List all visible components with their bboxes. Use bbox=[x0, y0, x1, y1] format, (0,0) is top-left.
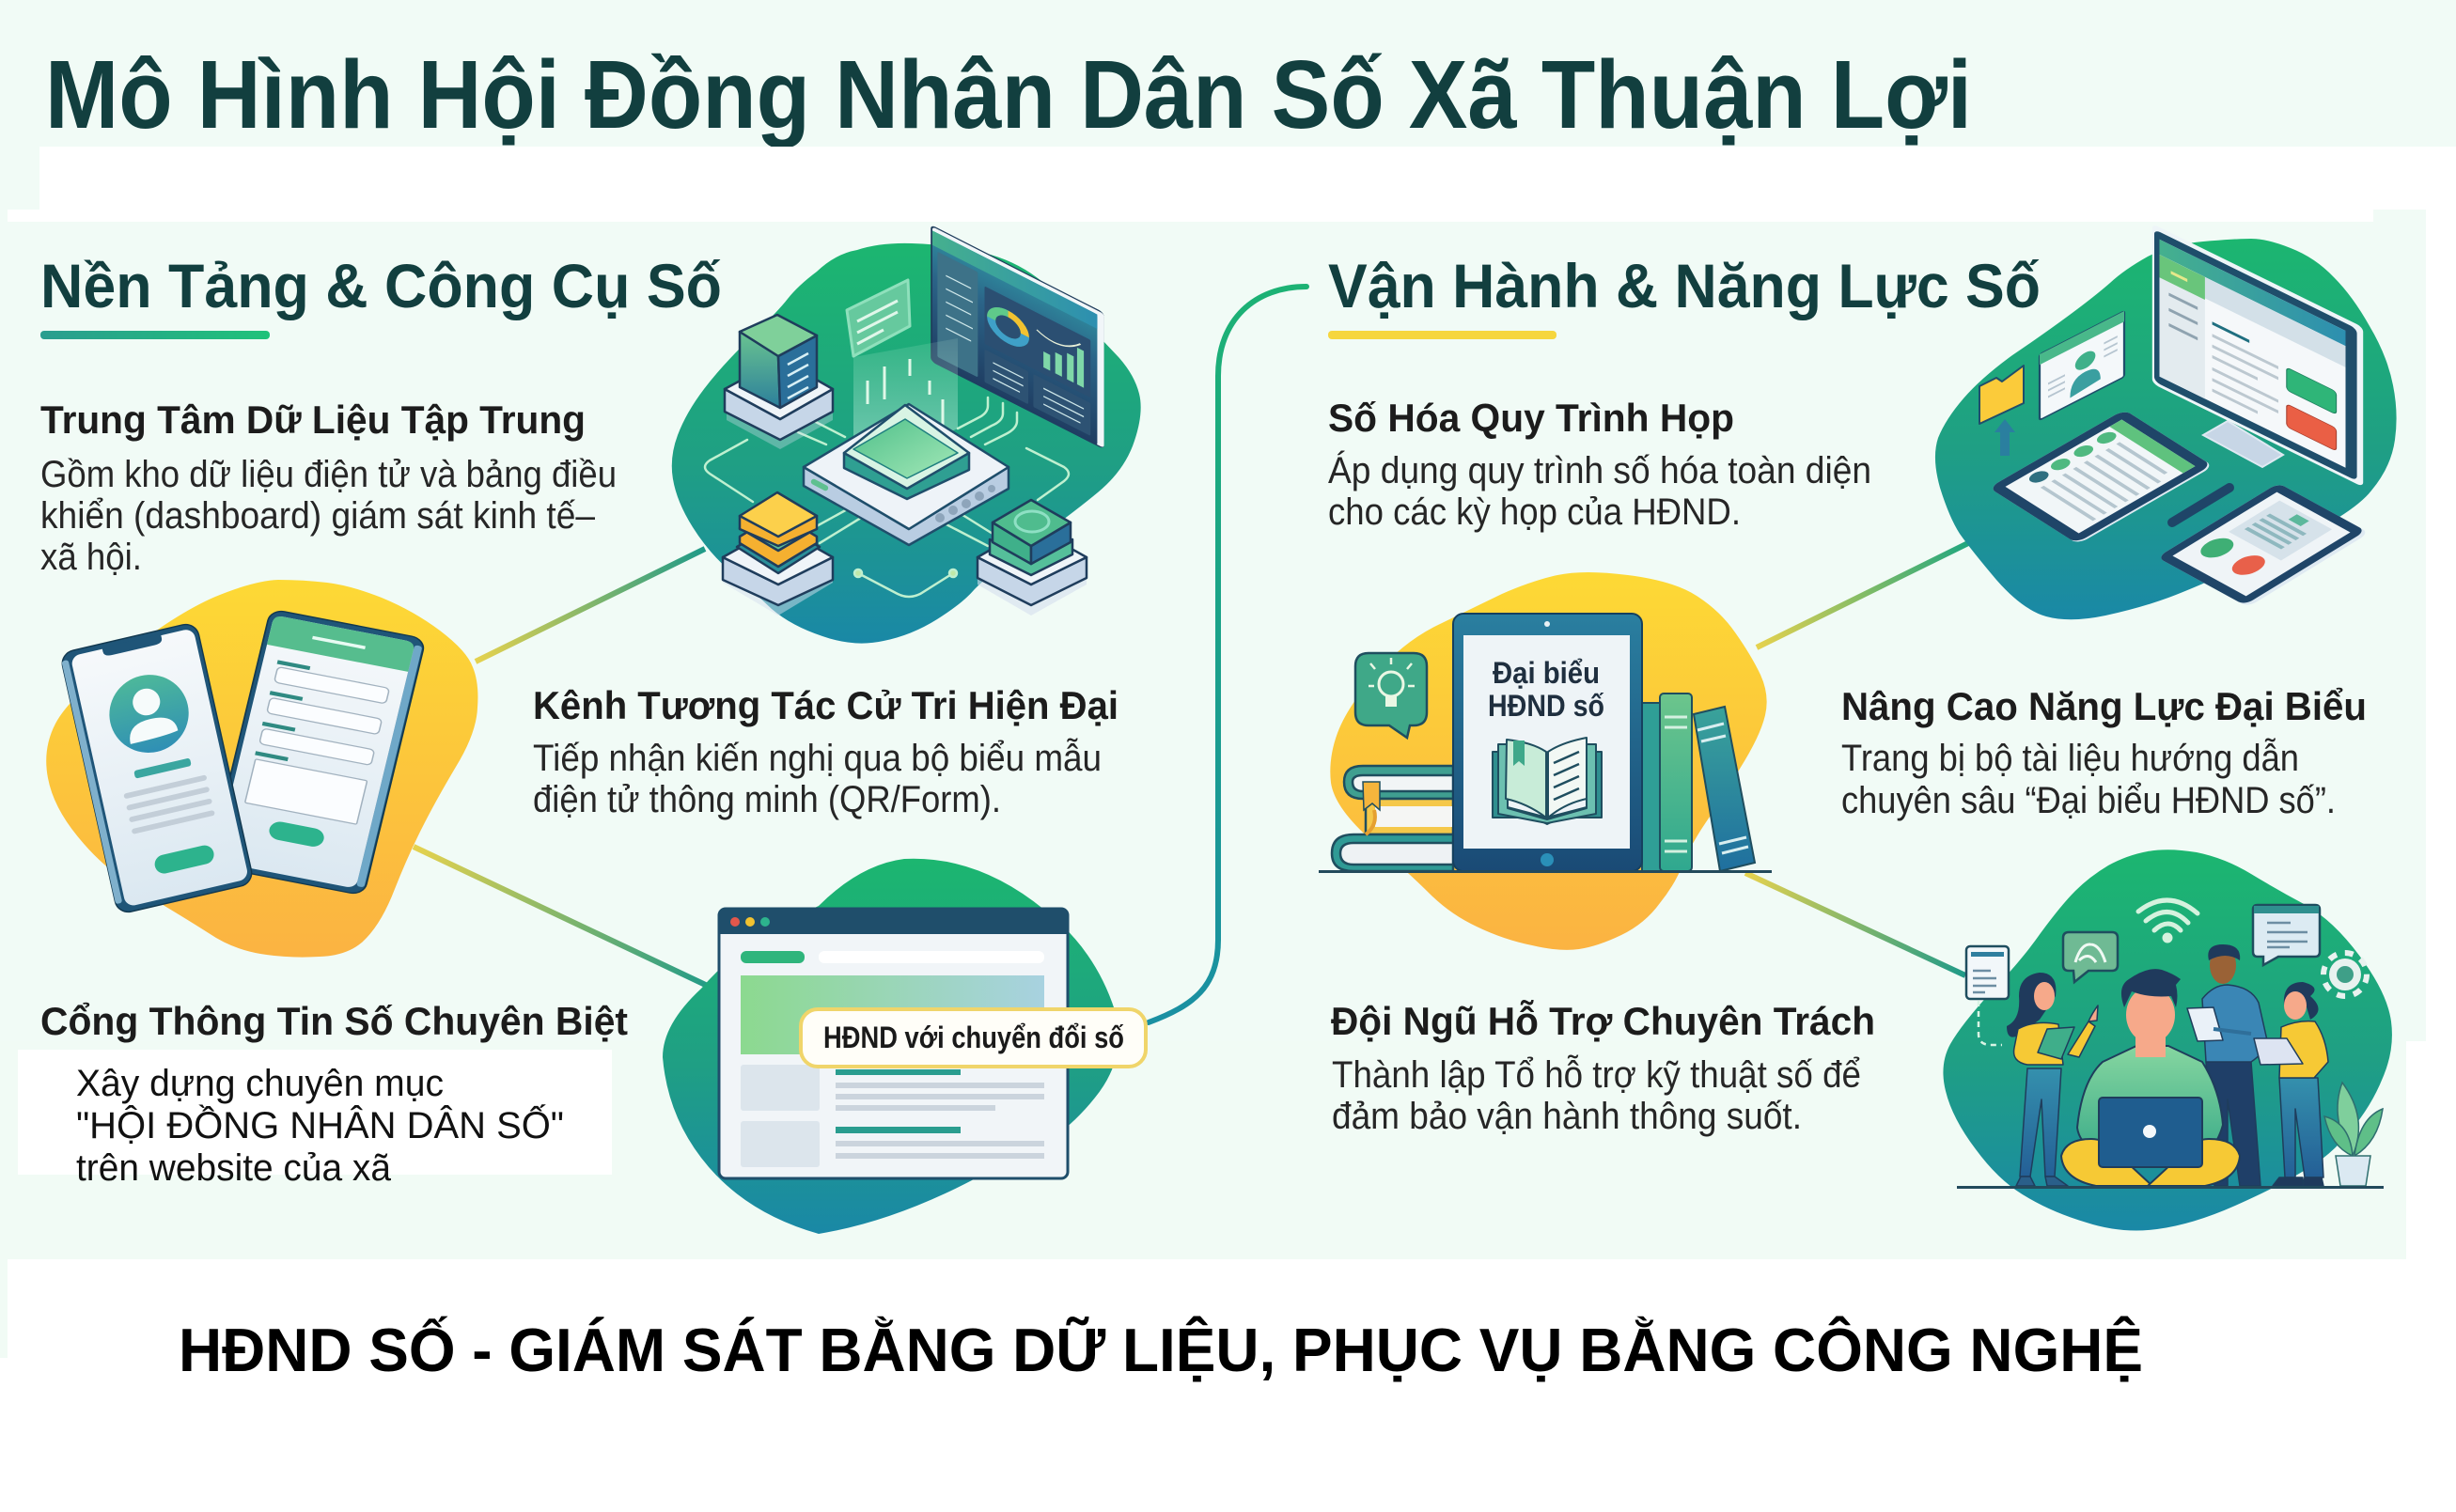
text block: Trung Tâm Dữ Liệu Tập Trung: khiển (dashboard) giám sát kinh tế– bbox=[40, 495, 596, 537]
title: Mô Hình Hội Đồng Nhân Dân Số Xã Thuận Lợi bbox=[45, 40, 1972, 148]
text block: Đội Ngũ Hỗ Trợ Chuyên Trách bbox=[1331, 998, 1875, 1137]
open book bbox=[1493, 738, 1602, 824]
tablet: agenda bbox=[1989, 410, 2214, 544]
shelf bbox=[1319, 870, 1772, 873]
person: woman right bbox=[2254, 982, 2328, 1186]
monitor stand bbox=[2203, 421, 2283, 467]
chat icon bbox=[2063, 932, 2118, 982]
plant bbox=[2324, 1083, 2383, 1186]
floating card bbox=[847, 280, 910, 356]
folder bbox=[1979, 366, 2024, 424]
text block: Số Hóa Quy Trình Họp: cho các kỳ họp của HĐND. bbox=[1328, 491, 1741, 533]
document card bbox=[1966, 946, 2009, 1045]
text block: Nâng Cao Năng Lực Đại Biểu: chuyên sâu “Đại biểu HĐND số”. bbox=[1841, 780, 2336, 821]
ground line bbox=[1957, 1186, 2384, 1189]
stylus bbox=[2172, 488, 2229, 522]
blob bbox=[1935, 239, 2397, 619]
yellow blob bbox=[1330, 572, 1767, 950]
illustration: phones bbox=[46, 580, 477, 958]
text block: Cổng Thông Tin Số Chuyên Biệt: trên website của xã bbox=[76, 1147, 392, 1189]
person: woman left bbox=[2007, 973, 2098, 1186]
text block: Số Hóa Quy Trình Họp: Số Hóa Quy Trình Họp bbox=[1328, 396, 1734, 440]
text block: Số Hóa Quy Trình Họp bbox=[1328, 396, 1871, 533]
illustration: support team bbox=[1943, 850, 2392, 1230]
tablet bbox=[1453, 614, 1642, 871]
yellow blob bbox=[46, 580, 477, 958]
badge bbox=[801, 1009, 1146, 1067]
tablet: vote bbox=[2157, 483, 2370, 607]
phone: profile bbox=[60, 622, 254, 914]
illustration: website portal bbox=[663, 859, 1146, 1234]
tablet caption: Đại biểu bbox=[1493, 656, 1600, 690]
blob bbox=[1943, 850, 2392, 1230]
text block: Cổng Thông Tin Số Chuyên Biệt: Cổng Thông Tin Số Chuyên Biệt bbox=[40, 999, 628, 1043]
yellow database stack bbox=[723, 492, 833, 616]
right books bbox=[1642, 694, 1755, 871]
text block: Kênh Tương Tác Cử Tri Hiện Đại: điện tử thông minh (QR/Form). bbox=[533, 779, 1001, 820]
circuit lines bbox=[705, 397, 1069, 597]
browser window bbox=[719, 909, 1068, 1178]
text block: Kênh Tương Tác Cử Tri Hiện Đại: Kênh Tương Tác Cử Tri Hiện Đại bbox=[533, 683, 1118, 727]
text block: Cổng Thông Tin Số Chuyên Biệt: Xây dựng chuyên mục bbox=[76, 1063, 444, 1104]
tablet caption: HĐND số bbox=[1488, 689, 1604, 723]
small profile window bbox=[2040, 311, 2124, 420]
text block: Đội Ngũ Hỗ Trợ Chuyên Trách: Thành lập Tổ hỗ trợ kỹ thuật số để bbox=[1332, 1053, 1861, 1096]
text block: Kênh Tương Tác Cử Tri Hiện Đại: Tiếp nhận kiến nghị qua bộ biểu mẫu bbox=[533, 737, 1102, 779]
heading: right column: Vận Hành & Năng Lực Số bbox=[1328, 251, 2041, 320]
illustration: data center bbox=[672, 225, 1141, 644]
upload arrow bbox=[1995, 419, 2015, 456]
connector lines bbox=[414, 542, 1970, 989]
heading: left column: Nền Tảng & Công Cụ Số bbox=[40, 251, 722, 320]
text block: Nâng Cao Năng Lực Đại Biểu bbox=[1841, 684, 2367, 821]
speech bubble with light bulb bbox=[1355, 653, 1427, 738]
person: man standing bbox=[2187, 944, 2267, 1186]
text block: Đội Ngũ Hỗ Trợ Chuyên Trách: đảm bảo vận hành thông suốt. bbox=[1332, 1096, 1802, 1137]
text block: Trung Tâm Dữ Liệu Tập Trung: xã hội. bbox=[40, 537, 142, 578]
illustration: meeting devices bbox=[1935, 224, 2397, 619]
text block: Kênh Tương Tác Cử Tri Hiện Đại bbox=[533, 683, 1118, 820]
text block: Trung Tâm Dữ Liệu Tập Trung: Gồm kho dữ liệu điện tử và bảng điều bbox=[40, 454, 617, 495]
central hub bbox=[804, 404, 1009, 545]
illustration: delegate handbook and books bbox=[1319, 572, 1772, 950]
person: central with laptop bbox=[2061, 969, 2240, 1186]
text block: Nâng Cao Năng Lực Đại Biểu: Nâng Cao Năng Lực Đại Biểu bbox=[1841, 684, 2367, 728]
tablet caption bbox=[1488, 656, 1604, 723]
text block: Trung Tâm Dữ Liệu Tập Trung: Trung Tâm Dữ Liệu Tập Trung bbox=[40, 397, 586, 442]
large monitor bbox=[2152, 224, 2363, 487]
message bubble bbox=[2253, 905, 2320, 965]
text block: Đội Ngũ Hỗ Trợ Chuyên Trách: Đội Ngũ Hỗ Trợ Chuyên Trách bbox=[1331, 998, 1875, 1043]
blob bbox=[663, 859, 1118, 1234]
gear icon bbox=[2323, 953, 2367, 996]
wifi icon bbox=[2138, 900, 2198, 941]
text block: Cổng Thông Tin Số Chuyên Biệt bbox=[18, 999, 628, 1189]
text block: Cổng Thông Tin Số Chuyên Biệt: "HỘI ĐỒNG NHÂN DÂN SỐ" bbox=[76, 1103, 564, 1146]
text block: Số Hóa Quy Trình Họp: Áp dụng quy trình số hóa toàn diện bbox=[1328, 449, 1871, 491]
badge: HĐND với chuyển đổi số bbox=[823, 1021, 1124, 1054]
phone: form bbox=[209, 609, 426, 896]
light beam bbox=[853, 338, 958, 451]
green cube bbox=[978, 500, 1087, 616]
text block: Nâng Cao Năng Lực Đại Biểu: Trang bị bộ tài liệu hướng dẫn bbox=[1841, 737, 2299, 779]
arrow: S-curve connecting left and right column bbox=[1149, 287, 1306, 1022]
tagline: HĐND SỐ - GIÁM SÁT BẰNG DỮ LIỆU, PHỤC VỤ BẰNG CÔNG NGHỆ bbox=[179, 1316, 2143, 1384]
left book stack bbox=[1332, 766, 1453, 871]
dashboard monitor bbox=[931, 225, 1104, 449]
server tower bbox=[725, 315, 833, 449]
blob bbox=[672, 243, 1141, 644]
text block: Trung Tâm Dữ Liệu Tập Trung bbox=[40, 397, 617, 578]
